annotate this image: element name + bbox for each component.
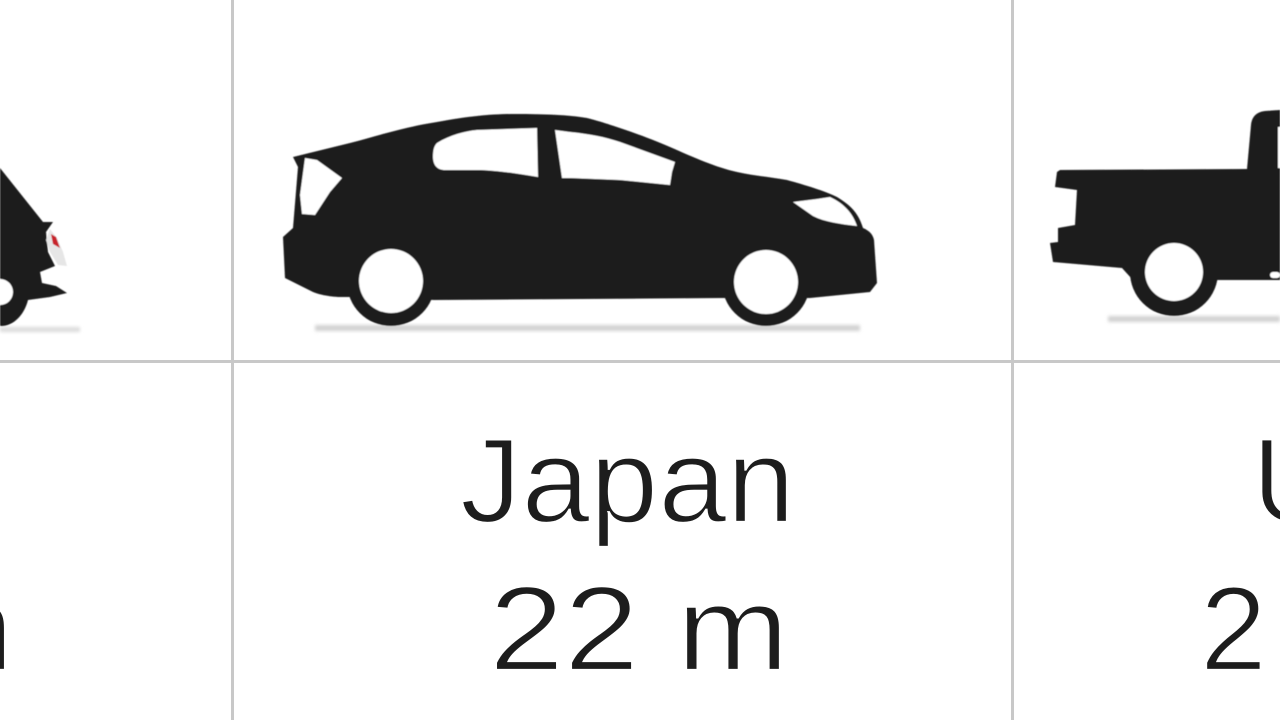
rear wheel [347,238,435,326]
label: Japan and 22 m: Japan [460,414,795,548]
icon: hatchback car silhouette, center column [283,114,877,331]
car body [283,114,877,300]
label: right column [1200,414,1280,696]
label: right column: 2 [1200,562,1267,696]
headlight [793,197,857,226]
front side window [555,130,675,185]
icon: partial car, left column [0,168,80,332]
label: Japan and 22 m: 22 m [489,562,789,696]
rear quarter window [300,158,342,215]
rear side window [433,128,538,177]
icon: partial pickup truck, right column [1050,110,1280,322]
shadow [315,325,860,331]
label: Japan and 22 m [460,414,795,696]
front wheel [722,238,810,326]
